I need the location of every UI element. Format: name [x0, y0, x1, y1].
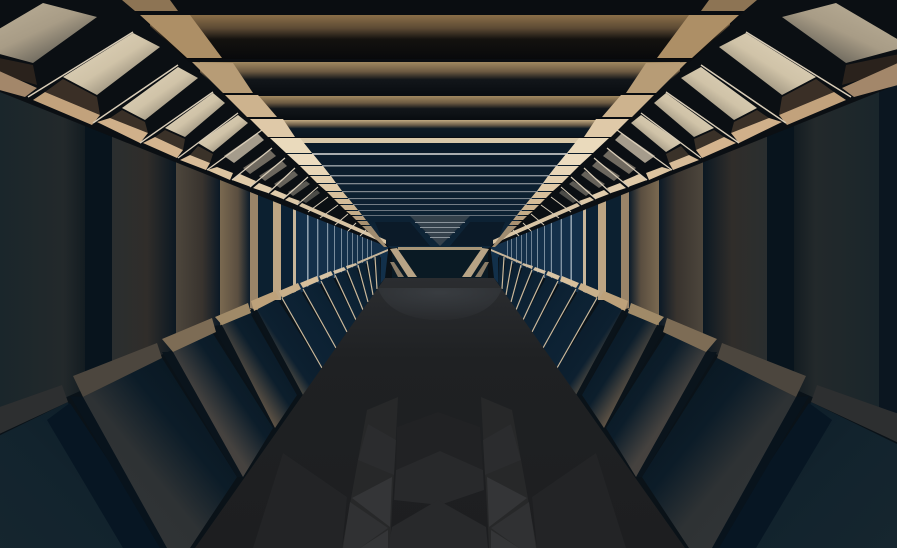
floor centre chevrons	[396, 412, 483, 470]
floor tiles left	[253, 397, 398, 548]
floor glow	[378, 288, 502, 320]
floor	[195, 278, 685, 548]
beam 3	[235, 96, 645, 119]
end portal opening	[392, 248, 488, 280]
ceiling far glow	[410, 216, 470, 246]
ceiling centre with beams	[122, 0, 762, 250]
left side of tunnel	[0, 0, 417, 548]
end portal lintel	[398, 247, 482, 250]
floor tiles right	[481, 397, 626, 548]
beam 1	[150, 15, 730, 59]
beam 4	[260, 120, 620, 137]
floor centre diamond	[394, 451, 484, 505]
beam 2	[200, 62, 680, 94]
right side of tunnel	[462, 0, 897, 548]
beam 5	[280, 138, 600, 248]
floor centre chevron lower	[388, 500, 488, 548]
